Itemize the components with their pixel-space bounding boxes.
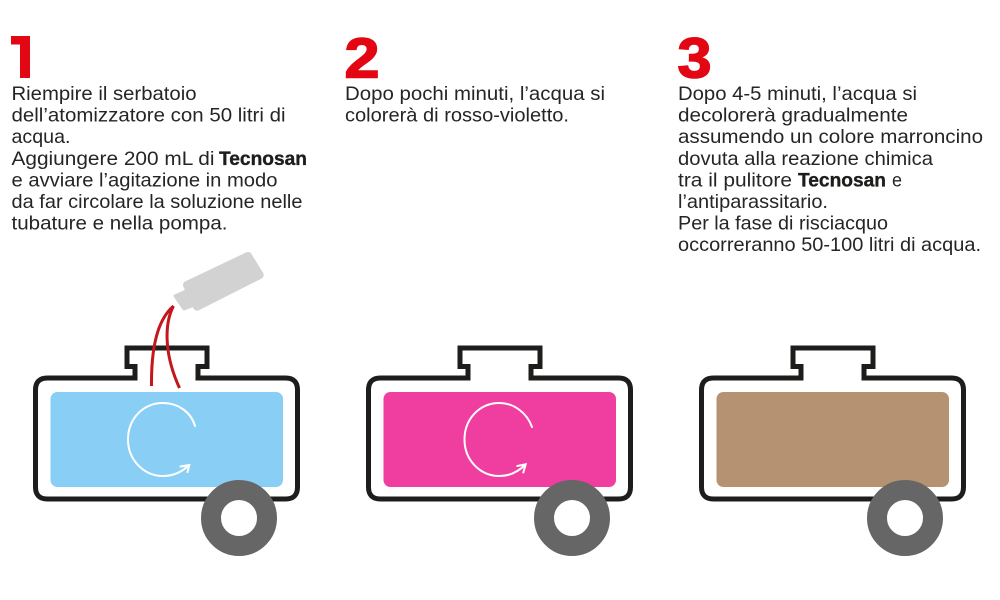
text: step 2 instructions: colorerà di rosso-violetto. [345,105,569,127]
wheel 2 [544,490,600,546]
text: step 3 instructions: dovuta alla reazione chimica [678,148,933,170]
text: step 2 instructions [345,83,605,127]
tank 2 liquid [384,392,616,487]
number 2: 2 [344,26,380,90]
text: step 1 instructions: dell’atomizzatore con 50 litri di [12,105,286,127]
tank 1 outline [36,348,298,499]
panel: step 1 [0,27,307,546]
text: step 3 instructions: assumendo un colore marroncino [678,126,983,148]
text: step 2 instructions: Dopo pochi minuti, l’acqua si [345,83,605,105]
panel: step 2 [344,26,630,546]
text: step 3 instructions: Dopo 4-5 minuti, l’acqua si [678,83,917,105]
text: step 3 instructions [678,83,983,256]
text: step 3 instructions: Per la fase di risciacquo [678,213,888,235]
neck opening 3 [804,375,862,381]
text: step 3 instructions: Tecnosan [798,169,886,191]
text: step 1 instructions [12,83,307,235]
tank 3 outline [702,348,964,499]
text: step 3 instructions: tra il pulitore [678,169,792,191]
text: step 3 instructions: occorreranno 50-100 litri di acqua. [678,234,981,256]
neck opening 1 [138,375,196,381]
tank 3 liquid [716,392,949,487]
rotation arrow 2 [464,403,532,476]
panel: step 3 [678,26,983,546]
text: step 3 instructions: decolorerà gradualmente [678,105,908,127]
text: step 1 instructions: e avviare l’agitazione in modo [12,169,278,191]
text: step 1 instructions: tubature e nella pompa. [12,213,227,235]
rotation arrow 1 [128,403,195,476]
icon: bottle [175,256,260,309]
text: step 1 instructions: Riempire il serbatoio [12,83,197,105]
wheel 1 [211,490,267,546]
text: step 1 instructions: acqua. [12,126,70,148]
text: step 1 instructions: da far circolare la soluzione nelle [12,191,302,213]
red liquid streams [151,306,180,388]
tank 2 outline [368,348,630,499]
wheel 3 [877,490,933,546]
text: step 1 instructions: Aggiungere 200 mL di [12,148,215,170]
text: step 3 instructions: e [892,169,902,191]
tank 1 liquid [50,392,283,487]
neck opening 2 [470,375,528,381]
number 3: 3 [678,26,712,90]
text: step 3 instructions: l’antiparassitario. [678,191,828,213]
text: step 1 instructions: Tecnosan [219,148,307,170]
